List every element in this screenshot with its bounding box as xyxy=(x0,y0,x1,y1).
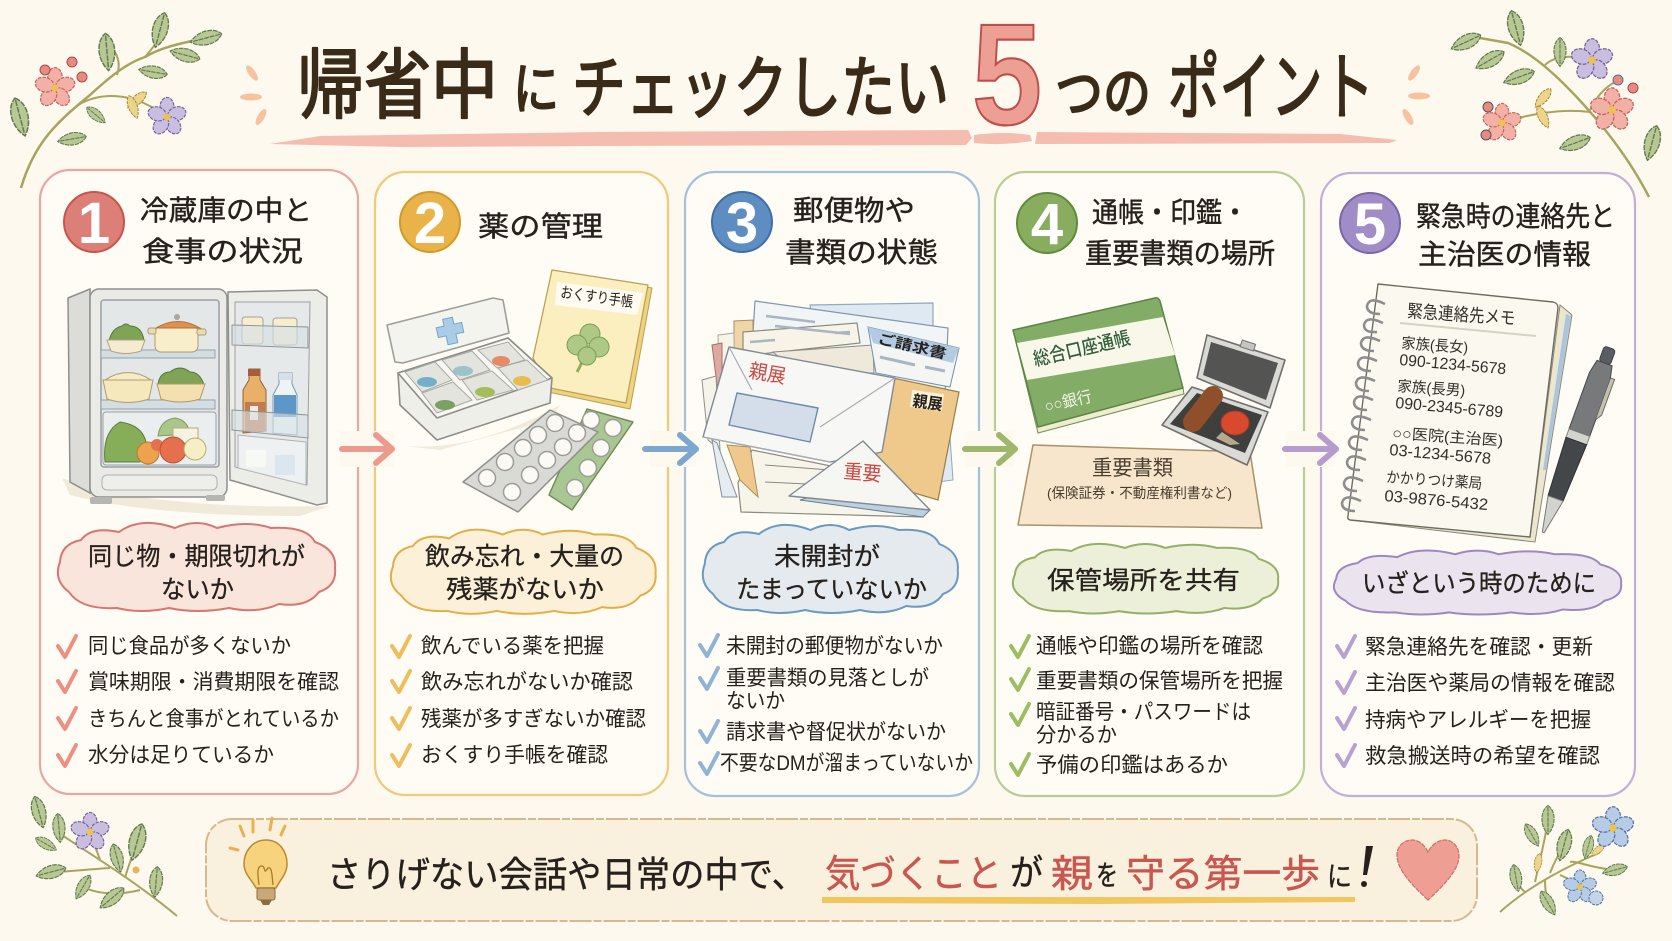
panel 5: emergency contacts xyxy=(1321,173,1635,796)
checklist 3: 請求書や督促状がないか xyxy=(726,721,946,744)
illustration: bank passbook: 総合口座通帳 xyxy=(1031,327,1133,371)
checklist 5: 救急搬送時の希望を確認 xyxy=(1365,745,1600,768)
memo text: 03-1234-5678 xyxy=(1389,442,1492,468)
fridge door jars and bottles xyxy=(232,317,308,485)
checklist 3: ないか xyxy=(726,690,785,713)
badge 5: 5 xyxy=(1354,192,1386,257)
icon: heart xyxy=(1397,840,1459,900)
illustration: medicine notebook: おくすり手帳 xyxy=(559,284,634,311)
banner message: を xyxy=(1096,860,1118,891)
arrow 2 to 3 xyxy=(645,431,696,467)
panel 1: fridge xyxy=(40,170,358,794)
memo text: ○○医院(主治医) xyxy=(1392,425,1504,450)
floral sprig bottom right xyxy=(1500,806,1636,918)
checklist 5: 主治医や薬局の情報を確認 xyxy=(1365,672,1615,695)
arrow 3 to 4 xyxy=(965,431,1015,467)
badge 4: 4 xyxy=(1031,192,1063,257)
cloud 1: ないか xyxy=(161,576,234,604)
banner message xyxy=(327,846,1373,904)
checklist 2 xyxy=(392,635,646,767)
memo text: かかりつけ薬局 xyxy=(1386,469,1483,493)
cloud 1 xyxy=(58,523,335,611)
illustration: pen xyxy=(1533,344,1624,537)
illustration: important documents: 重要書類 xyxy=(1092,457,1173,480)
fridge shelf food xyxy=(103,314,206,464)
panel 4: bankbook and seal xyxy=(995,172,1304,796)
badge 1: 1 xyxy=(78,191,110,256)
title sparkle right xyxy=(1400,64,1430,127)
memo text: 090-2345-6789 xyxy=(1395,395,1504,421)
banner message: に xyxy=(1327,861,1352,892)
memo text: 家族(長男) xyxy=(1397,378,1466,400)
title text: つの xyxy=(1055,62,1151,125)
illustration: bank passbook xyxy=(1013,298,1184,433)
checklist 5 xyxy=(1337,636,1615,768)
pill compartments xyxy=(405,342,548,413)
yellow envelope: 親展 xyxy=(911,392,944,414)
title sparkle left xyxy=(240,64,269,127)
illustration: important documents xyxy=(1018,445,1262,528)
title underline xyxy=(270,130,1397,147)
heading 3: 書類の状態 xyxy=(785,237,938,268)
badge 1 xyxy=(64,191,124,256)
heading 3 xyxy=(785,195,938,268)
checklist 4: 予備の印鑑はあるか xyxy=(1036,754,1228,777)
heading 2: 薬の管理 xyxy=(478,211,603,242)
spiral rings xyxy=(1342,300,1385,511)
main envelope: 親展 xyxy=(747,359,788,388)
checklist 3: 不要なDMが溜まっていないか xyxy=(720,752,973,775)
main envelope xyxy=(703,347,895,462)
heading 1: 食事の状況 xyxy=(142,236,303,267)
illustration: pill case xyxy=(387,298,560,450)
title text xyxy=(297,44,1374,129)
blue card xyxy=(868,327,959,387)
checklist 2: 残薬が多すぎないか確認 xyxy=(421,708,646,731)
checklist 5: 持病やアレルギーを把握 xyxy=(1365,709,1591,732)
heading 5: 主治医の情報 xyxy=(1418,239,1591,270)
heading 5 xyxy=(1416,201,1615,270)
cloud 2: 残薬がないか xyxy=(446,576,604,604)
badge 2 xyxy=(400,191,460,256)
illustration: bank passbook: ○○銀行 xyxy=(1043,388,1094,416)
checklist 2: 飲み忘れがないか確認 xyxy=(421,671,633,694)
heading 5: 緊急時の連絡先と xyxy=(1416,201,1615,232)
blue card: ご請求書 xyxy=(876,330,948,362)
title text: に xyxy=(513,58,559,121)
clover xyxy=(567,324,609,372)
checklist 1: 同じ食品が多くないか xyxy=(88,635,291,658)
arrow 1 to 2 xyxy=(340,431,394,467)
checklist 1: 賞味期限・消費期限を確認 xyxy=(88,671,339,694)
floral sprig bottom left xyxy=(28,795,177,916)
document lines xyxy=(750,316,850,342)
bottom envelope: 重要 xyxy=(843,460,882,486)
title xyxy=(240,0,1430,155)
checklist 4: 重要書類の保管場所を把握 xyxy=(1036,670,1283,693)
illustration: important documents: (保険証券・不動産権利書など) xyxy=(1047,485,1232,501)
cloud 3: たまっていないか xyxy=(736,576,927,604)
title text: チェックしたい xyxy=(572,51,949,127)
cloud 1: 同じ物・期限切れが xyxy=(88,543,305,571)
panel 2: medicine xyxy=(375,172,668,795)
title text: ポイント xyxy=(1168,46,1374,129)
cloud 5: いざという時のために xyxy=(1362,569,1596,598)
checklist 3: 重要書類の見落としが xyxy=(726,667,929,690)
floral sprig top right xyxy=(1449,9,1664,197)
heading 1 xyxy=(140,195,312,267)
cloud 4 xyxy=(1013,544,1278,613)
arrow 4 to 5 xyxy=(1285,431,1336,467)
banner message: 気づくこと xyxy=(825,854,1002,896)
banner message: 親 xyxy=(1051,854,1093,896)
title text: 帰省中 xyxy=(297,44,498,129)
checklist 2: おくすり手帳を確認 xyxy=(421,744,608,767)
banner message: さりげない会話や日常の中で、 xyxy=(327,854,806,895)
badge 3 xyxy=(712,191,772,256)
heading 4 xyxy=(1085,197,1275,269)
checklist 5: 緊急連絡先を確認・更新 xyxy=(1365,636,1593,659)
checklist 1: 水分は足りているか xyxy=(88,744,274,767)
cloud 3 xyxy=(703,525,958,613)
checklist 3: 未開封の郵便物がないか xyxy=(726,635,943,658)
checklist 1: きちんと食事がとれているか xyxy=(88,708,339,731)
cloud 2 xyxy=(391,530,656,614)
banner message: 守る第一歩 xyxy=(1126,854,1320,896)
heading 1: 冷蔵庫の中と xyxy=(140,195,312,226)
heading 4: 重要書類の場所 xyxy=(1085,238,1275,269)
checklist 1 xyxy=(58,635,339,767)
badge 2: 2 xyxy=(414,191,446,256)
illustration: seal case xyxy=(1162,335,1285,465)
illustration: pile of mail xyxy=(702,301,959,517)
banner message: が xyxy=(1010,852,1043,893)
floral sprig top left xyxy=(7,11,223,188)
illustration: pill sheets xyxy=(463,409,633,512)
badge 3: 3 xyxy=(726,191,758,256)
memo text: 家族(長女) xyxy=(1401,335,1469,357)
illustration: contact notebook xyxy=(1342,284,1572,542)
cloud 4: 保管場所を共有 xyxy=(1047,567,1240,595)
yellow envelope xyxy=(870,378,959,500)
badge 5 xyxy=(1340,192,1400,257)
memo text xyxy=(1384,301,1516,514)
panel 3: mail xyxy=(685,172,979,796)
text underline xyxy=(822,897,1355,904)
checklist 4: 暗証番号・パスワードは xyxy=(1036,701,1251,724)
cloud 5 xyxy=(1334,551,1621,615)
illustration: medicine notebook xyxy=(533,270,652,409)
checklist 4 xyxy=(1011,635,1283,777)
badge 4 xyxy=(1017,192,1077,257)
memo text: 緊急連絡先メモ xyxy=(1407,301,1516,329)
heading 3: 郵便物や xyxy=(793,195,915,226)
memo text: 090-1234-5678 xyxy=(1399,352,1507,378)
illustration: open fridge xyxy=(62,289,330,516)
bottom banner xyxy=(206,818,1477,921)
memo text: 03-9876-5432 xyxy=(1384,488,1489,514)
heading 4: 通帳・印鑑・ xyxy=(1092,197,1248,228)
bottom envelope xyxy=(789,441,930,517)
checklist 2: 飲んでいる薬を把握 xyxy=(421,635,604,658)
cloud 3: 未開封が xyxy=(774,543,880,571)
checklist 4: 分かるか xyxy=(1036,724,1117,747)
cloud 2: 飲み忘れ・大量の xyxy=(425,543,624,571)
checklist 4: 通帳や印鑑の場所を確認 xyxy=(1036,635,1263,658)
icon: light bulb xyxy=(230,818,287,905)
checklist 3 xyxy=(700,635,973,775)
